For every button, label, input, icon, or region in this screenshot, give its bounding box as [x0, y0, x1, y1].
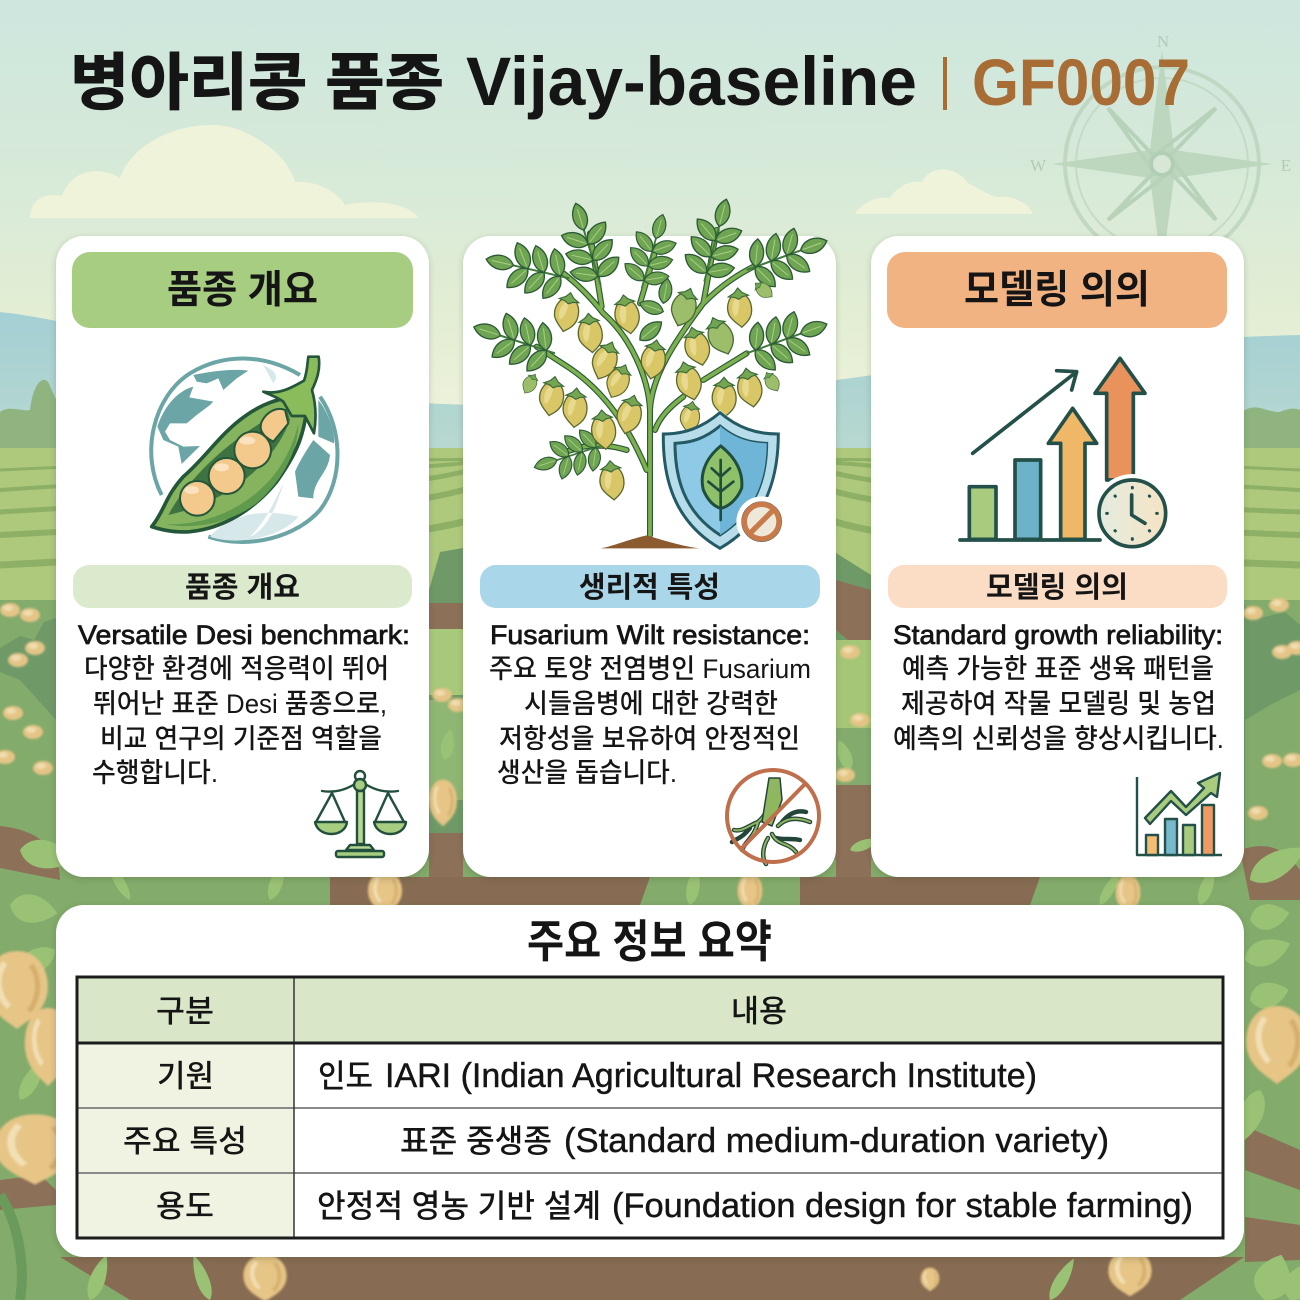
heading pill: modeling significance: 모델링 의의 — [964, 269, 1150, 312]
title separator — [943, 57, 947, 110]
heading pill: modeling significance — [887, 252, 1227, 328]
table: summary — [77, 977, 1223, 1238]
panel: key information summary — [56, 905, 1244, 1257]
heading pill: variety overview — [72, 252, 413, 328]
subheading pill: modeling significance — [888, 565, 1227, 608]
table header row: 내용 — [731, 994, 787, 1029]
icon: growth chart with clock — [960, 358, 1172, 553]
title latin part: Vijay-baseline — [466, 43, 917, 120]
table row: key trait: 주요 특성 — [123, 1124, 247, 1159]
background: compass — [1030, 32, 1291, 270]
table row: use: 안정적 영농 기반 설계 — [317, 1188, 601, 1224]
text block: modeling significance — [893, 620, 1224, 754]
table row: origin: 인도 — [318, 1058, 373, 1094]
text block: modeling significance: 예측의 신뢰성을 향상시킵니다. — [893, 724, 1224, 754]
table row: origin: 기원 — [157, 1059, 214, 1094]
table row: key trait: (Standard medium-duration variety) — [564, 1122, 1109, 1160]
background: left cloud — [30, 125, 419, 218]
table row: key trait — [123, 1122, 1109, 1160]
icon: small bar chart — [1137, 773, 1222, 855]
background: foliage and soil — [0, 600, 1300, 1300]
heading pill: variety overview: 품종 개요 — [167, 269, 318, 312]
background: distant hills — [0, 380, 1300, 460]
table header row: 구분 — [156, 994, 214, 1029]
text block: variety overview: 비교 연구의 기준점 역할을 — [100, 724, 382, 754]
panel: variety overview — [56, 236, 429, 877]
subheading pill: physiological traits: 생리적 특성 — [579, 571, 720, 604]
title: 병아리콩 품종 — [70, 49, 444, 118]
illustration: chickpea plant — [465, 192, 837, 548]
text block: modeling significance: 제공하여 작물 모델링 및 농업 — [901, 689, 1216, 719]
title code: GF0007 — [972, 45, 1190, 119]
table row: use — [156, 1187, 1193, 1225]
text block: physiological traits — [489, 620, 811, 788]
background: compass: N — [1157, 32, 1169, 51]
icon: pea pod and globe — [151, 357, 337, 542]
text block: variety overview: 뛰어난 표준 Desi 품종으로, — [93, 689, 387, 719]
table header row — [156, 994, 787, 1029]
text block: physiological traits: Fusarium Wilt resistance: — [490, 620, 810, 650]
text block: physiological traits: 저항성을 보유하여 안정적인 — [499, 724, 800, 754]
background: compass: E — [1281, 156, 1291, 175]
heading: key information summary: 주요 정보 요약 — [527, 916, 772, 967]
text block: variety overview: Versatile Desi benchmark: — [78, 620, 410, 650]
text block: variety overview: 다양한 환경에 적응력이 뛰어 — [84, 654, 389, 684]
text block: physiological traits: 생산을 돕습니다. — [497, 758, 677, 788]
subheading pill: variety overview: 품종 개요 — [185, 571, 300, 604]
icon: balance scale — [315, 771, 406, 857]
panel: modeling significance — [871, 236, 1244, 877]
subheading pill: variety overview — [73, 565, 412, 608]
background: compass: W — [1030, 156, 1047, 175]
table row: use: 용도 — [156, 1189, 214, 1224]
table row: use: (Foundation design for stable farming) — [612, 1187, 1193, 1225]
icon: roots prohibited — [727, 770, 819, 864]
text block: variety overview — [78, 620, 410, 788]
text block: modeling significance: Standard growth reliability: — [893, 620, 1223, 650]
text block: physiological traits: 시들음병에 대한 강력한 — [524, 689, 778, 719]
subheading pill: physiological traits — [480, 565, 820, 608]
icon: shield with leaf — [661, 410, 787, 552]
text block: variety overview: 수행합니다. — [92, 758, 218, 788]
background: field rows — [0, 459, 1300, 565]
subheading pill: modeling significance: 모델링 의의 — [986, 571, 1128, 604]
text block: physiological traits: 주요 토양 전염병인 Fusarium — [489, 654, 811, 684]
panel: physiological traits — [463, 192, 837, 877]
background: right cloud — [855, 169, 1033, 214]
title — [70, 43, 1190, 120]
table row: key trait: 표준 중생종 — [400, 1123, 552, 1159]
table row: origin: IARI (Indian Agricultural Research Institute) — [385, 1057, 1037, 1095]
text block: modeling significance: 예측 가능한 표준 생육 패턴을 — [902, 654, 1214, 684]
background: chickpea pods — [0, 598, 1300, 1300]
